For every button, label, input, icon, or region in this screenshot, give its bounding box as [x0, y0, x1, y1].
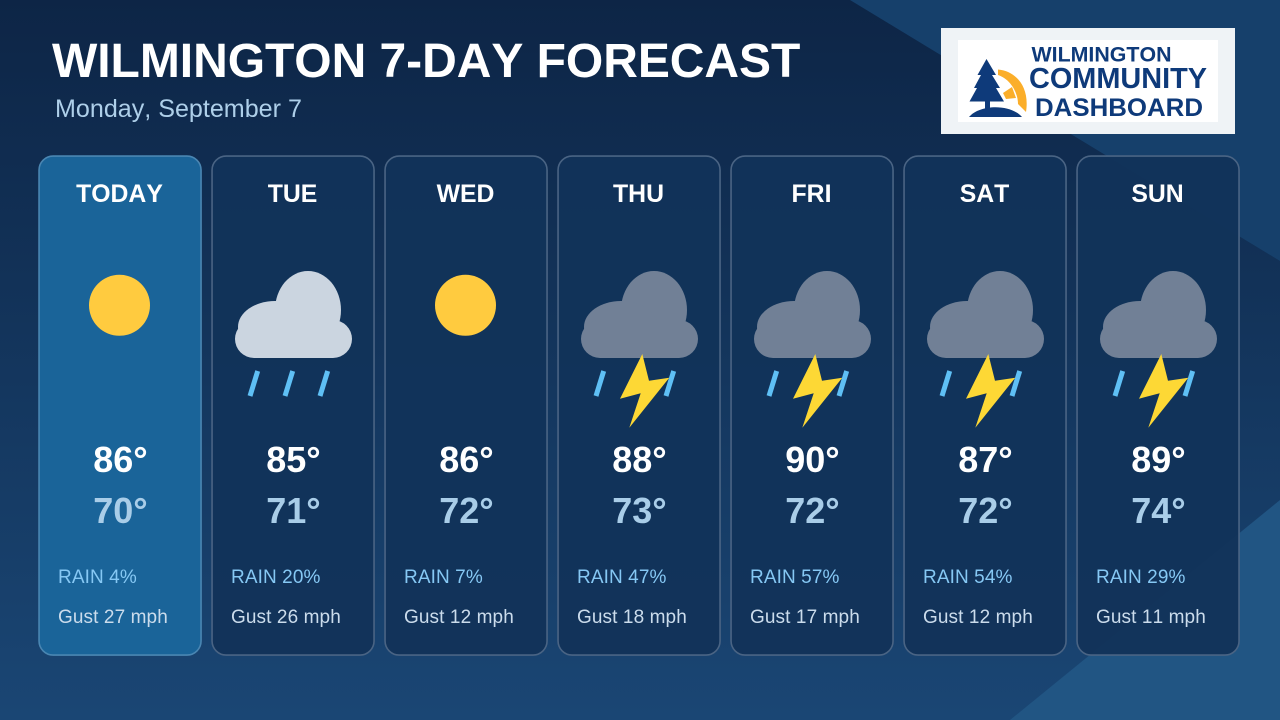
subtitle: date: Monday, September 7: [55, 95, 302, 123]
panel: thursday: [557, 155, 721, 656]
high temperature: 87°: [958, 439, 1013, 480]
icon: thunderstorm: [557, 155, 721, 656]
panel: friday: [730, 155, 894, 656]
high temperature: 88°: [612, 439, 667, 480]
logo: COMMUNITY: [1029, 63, 1207, 95]
icon: rain cloud: [211, 155, 375, 656]
rain chance: RAIN 4%: [58, 567, 137, 588]
panel: saturday: [903, 155, 1067, 656]
day label: TUE: [268, 181, 317, 208]
panel: tuesday: [211, 155, 375, 656]
rain chance: RAIN 54%: [923, 567, 1013, 588]
icon: thunderstorm: [903, 155, 1067, 656]
wind gust: Gust 26 mph: [231, 607, 341, 628]
panel: today: [38, 155, 202, 656]
day label: SAT: [960, 181, 1009, 208]
low temperature: 72°: [439, 490, 494, 531]
high temperature: 90°: [785, 439, 840, 480]
day label: THU: [613, 181, 664, 208]
rain chance: RAIN 20%: [231, 567, 321, 588]
icon: sun: [38, 155, 202, 656]
icon: sun: [384, 155, 548, 656]
rain chance: RAIN 29%: [1096, 567, 1186, 588]
logo: WILMINGTON: [1032, 44, 1172, 66]
panel: wednesday: [384, 155, 548, 656]
low temperature: 72°: [958, 490, 1013, 531]
low temperature: 70°: [93, 490, 148, 531]
low temperature: 72°: [785, 490, 840, 531]
high temperature: 85°: [266, 439, 321, 480]
title: WILMINGTON 7-DAY FORECAST: [52, 35, 800, 88]
high temperature: 86°: [439, 439, 494, 480]
day label: TODAY: [76, 181, 163, 208]
rain chance: RAIN 57%: [750, 567, 840, 588]
rain chance: RAIN 47%: [577, 567, 667, 588]
low temperature: 74°: [1131, 490, 1186, 531]
rain chance: RAIN 7%: [404, 567, 483, 588]
high temperature: 89°: [1131, 439, 1186, 480]
wind gust: Gust 17 mph: [750, 607, 860, 628]
icon: pine tree and gauge: [969, 59, 1027, 117]
high temperature: 86°: [93, 439, 148, 480]
wind gust: Gust 12 mph: [923, 607, 1033, 628]
low temperature: 73°: [612, 490, 667, 531]
logo: [941, 28, 1235, 134]
icon: thunderstorm: [730, 155, 894, 656]
wind gust: Gust 12 mph: [404, 607, 514, 628]
wind gust: Gust 18 mph: [577, 607, 687, 628]
icon: thunderstorm: [1076, 155, 1240, 656]
day label: WED: [437, 181, 494, 208]
low temperature: 71°: [266, 490, 321, 531]
panel: sunday: [1076, 155, 1240, 656]
wind gust: Gust 11 mph: [1096, 607, 1206, 628]
logo: DASHBOARD: [1035, 94, 1203, 122]
day label: SUN: [1131, 181, 1184, 208]
wind gust: Gust 27 mph: [58, 607, 168, 628]
day label: FRI: [792, 181, 831, 208]
